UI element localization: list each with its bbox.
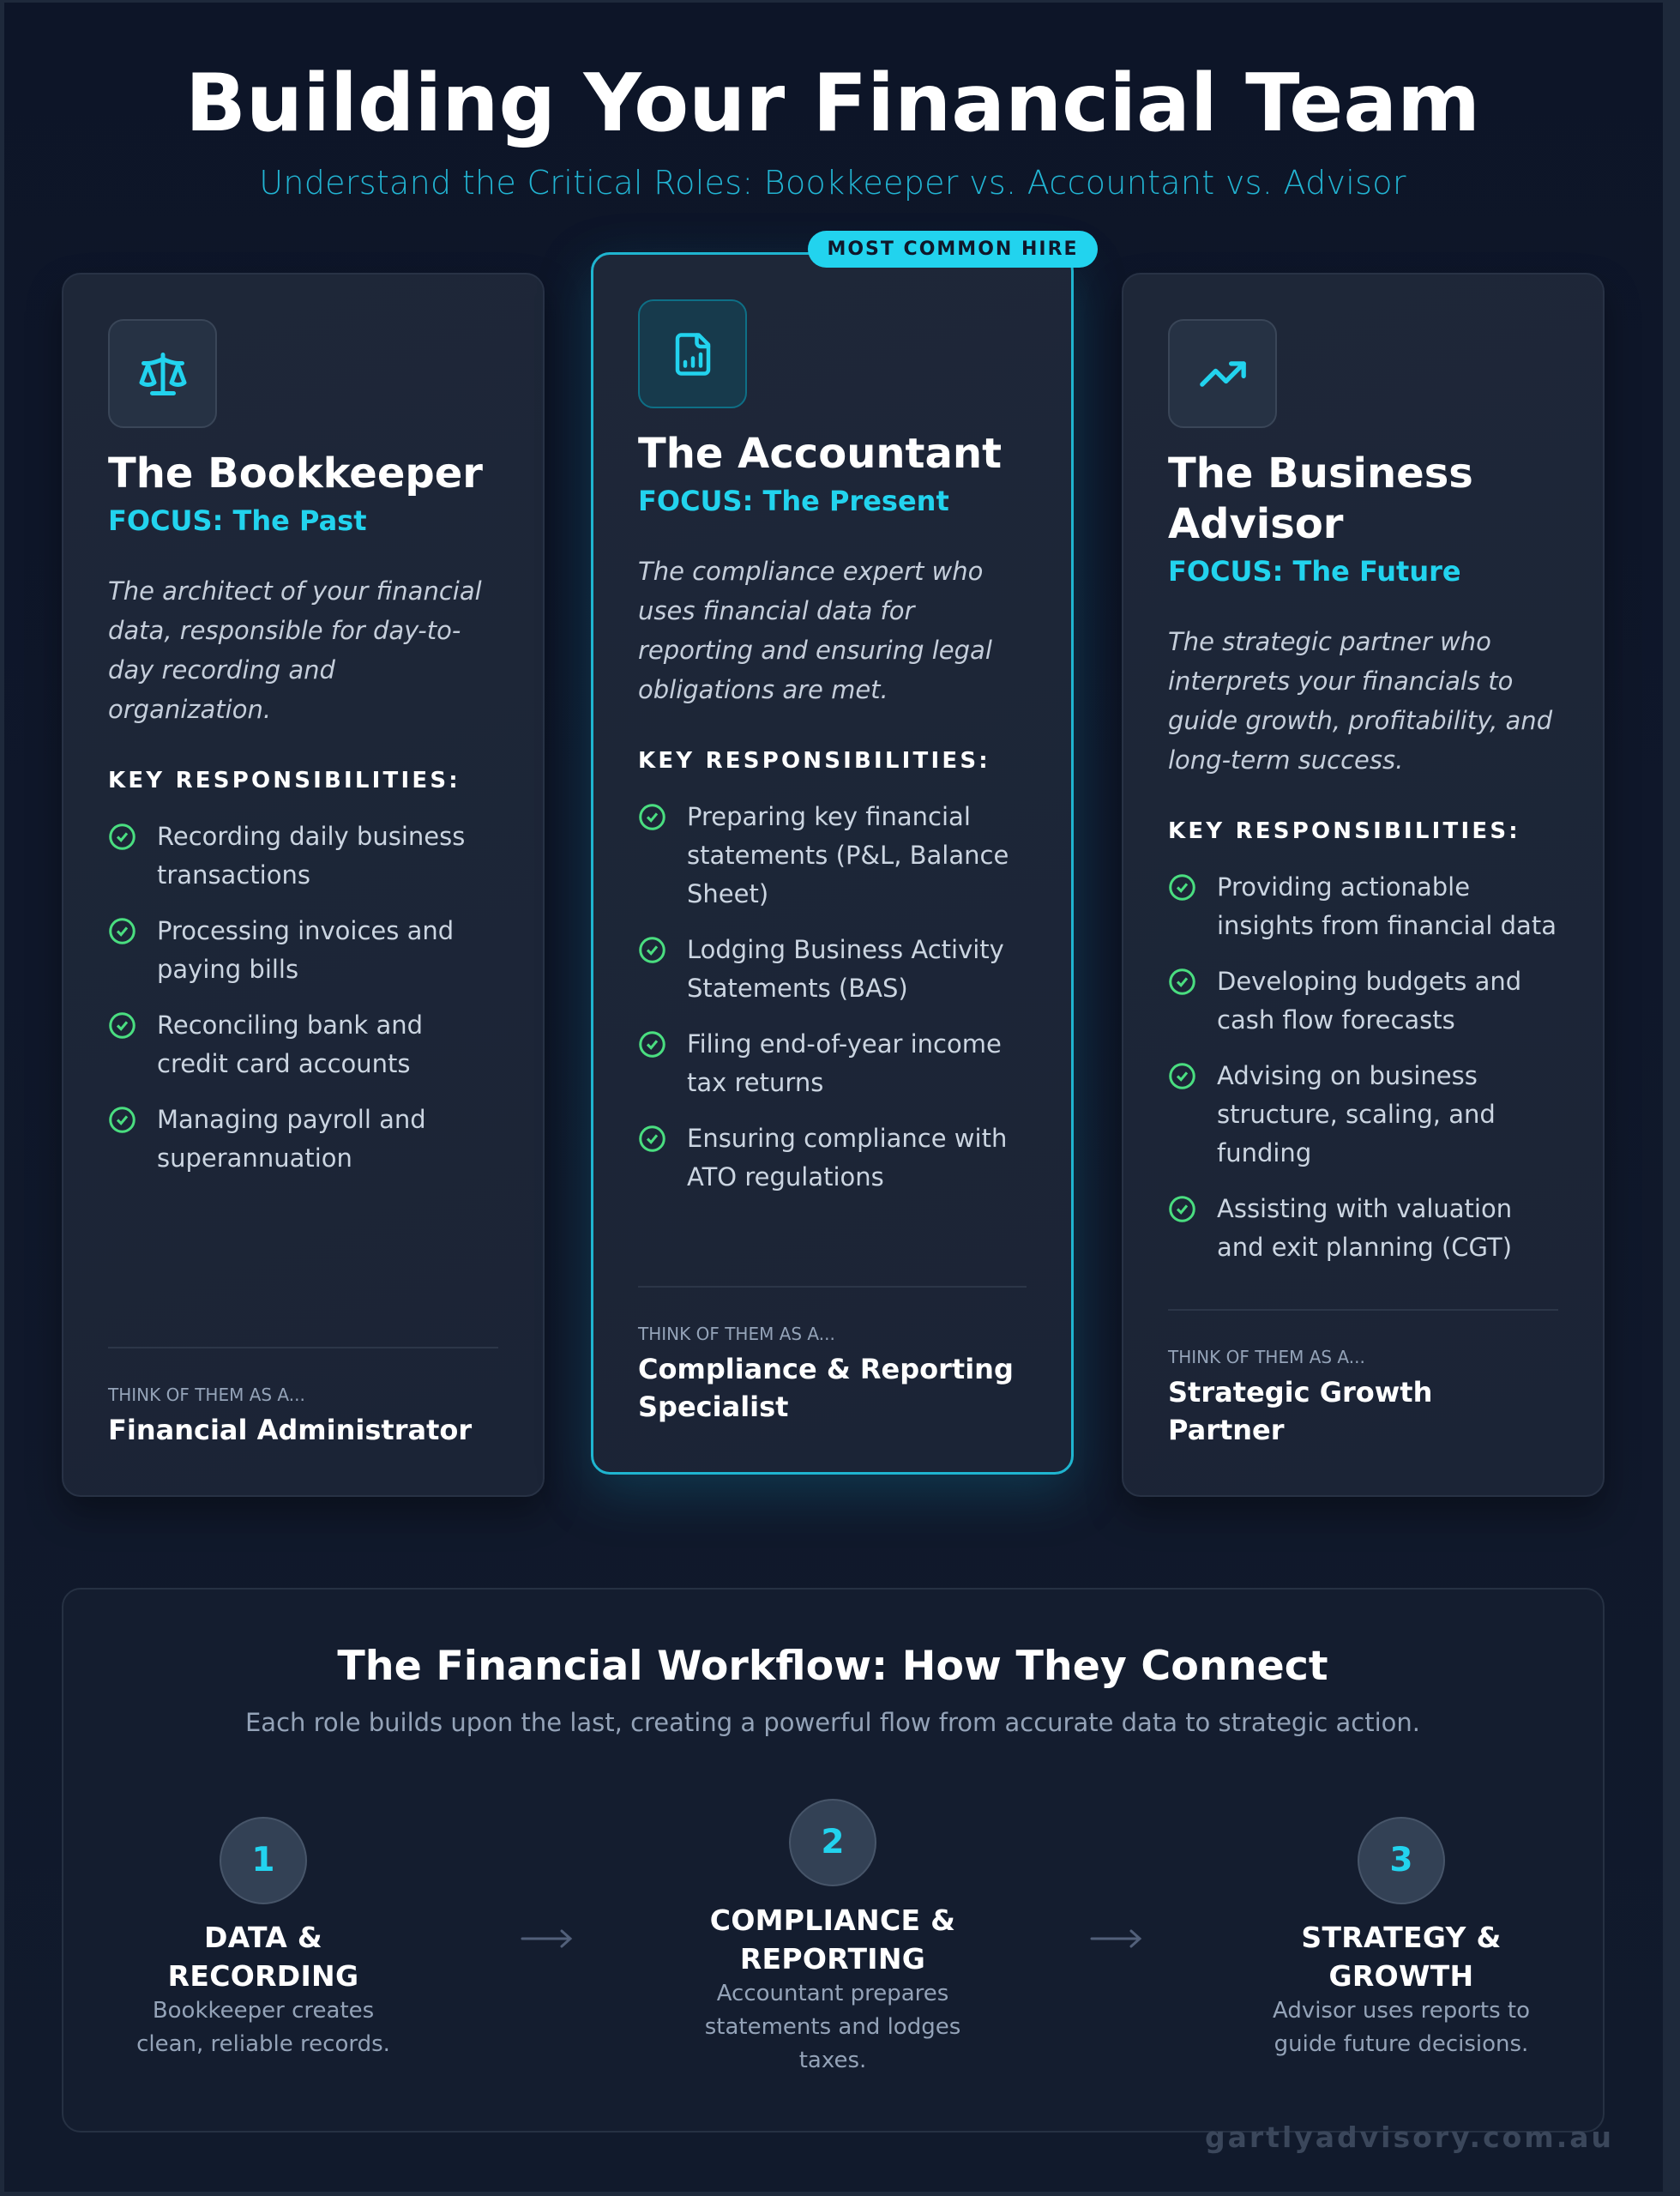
circle 2: [789, 1799, 876, 1886]
description: [1168, 627, 1552, 775]
step 2 text: statements and lodges: [705, 2014, 960, 2040]
responsibilities list: transactions: [157, 860, 310, 890]
step 1: [136, 1817, 390, 2057]
step 3 text: Advisor uses reports to: [1273, 1998, 1530, 2024]
description: interprets your financials to: [1168, 667, 1513, 696]
responsibilities list: Reconciling bank and: [157, 1011, 423, 1040]
step 3 text: [1273, 1998, 1530, 2057]
footer: think of them as: THINK OF THEM AS A...: [108, 1385, 305, 1405]
step 2 text: [705, 1981, 960, 2073]
subtitle: Understand the Critical Roles: Bookkeeper vs. Accountant vs. Advisor: [259, 164, 1406, 202]
circle 1: 1: [251, 1841, 275, 1879]
footer: think of them as: Specialist: [638, 1391, 788, 1423]
description: The architect of your financial: [108, 576, 482, 606]
step 2: [705, 1799, 960, 2073]
footer: think of them as: THINK OF THEM AS A...: [638, 1324, 835, 1344]
badge: most common hire: MOST COMMON HIRE: [827, 238, 1079, 260]
key responsibilities heading: KEY RESPONSIBILITIES:: [638, 748, 991, 774]
heading: The Accountant: The Accountant: [638, 430, 1002, 478]
circle 2: 2: [821, 1823, 845, 1861]
responsibilities list: Recording daily business: [157, 822, 465, 851]
description: organization.: [108, 695, 271, 724]
step 3: [1273, 1817, 1530, 2057]
key responsibilities heading: KEY RESPONSIBILITIES:: [108, 768, 461, 793]
footer: think of them as: Financial Administrator: [108, 1414, 472, 1446]
responsibilities list: superannuation: [157, 1143, 352, 1173]
heading: The Business Advisor: [1168, 449, 1473, 548]
step 1 label: RECORDING: [168, 1959, 358, 1993]
description: uses financial data for: [638, 596, 914, 625]
title: Building Your Financial Team: [185, 57, 1480, 149]
description: data, responsible for day-to-: [108, 616, 461, 645]
responsibilities list: paying bills: [157, 955, 298, 984]
responsibilities list: Providing actionable: [1217, 872, 1470, 902]
responsibilities list: Sheet): [687, 879, 768, 908]
icon: scale: [108, 319, 217, 428]
step 1 text: [136, 1998, 390, 2057]
step 1 label: DATA &: [204, 1921, 322, 1954]
footer: think of them as: [638, 1286, 1027, 1426]
responsibilities list: cash flow forecasts: [1217, 1005, 1455, 1035]
step 2 label: REPORTING: [740, 1942, 925, 1976]
footer: think of them as: Compliance & Reporting: [638, 1353, 1014, 1385]
footer: think of them as: Partner: [1168, 1414, 1285, 1446]
step 3 text: guide future decisions.: [1274, 2031, 1528, 2057]
panel: workflow: [62, 1588, 1605, 2133]
description: day recording and: [108, 655, 335, 685]
responsibilities list: Managing payroll and: [157, 1105, 426, 1134]
responsibilities list: and exit planning (CGT): [1217, 1233, 1512, 1262]
description: [108, 576, 482, 724]
responsibilities list: Statements (BAS): [687, 974, 908, 1003]
circle 1: [220, 1817, 307, 1904]
responsibilities list: Preparing key financial: [687, 802, 971, 831]
responsibilities list: Filing end-of-year income: [687, 1029, 1002, 1059]
step 1 text: Bookkeeper creates: [153, 1998, 374, 2024]
step 2 label: COMPLIANCE &: [710, 1903, 955, 1937]
workflow heading: The Financial Workflow: How They Connect: [337, 1643, 1328, 1690]
watermark: gartlyadvisory.com.au: [1205, 2121, 1614, 2154]
focus: FOCUS: The Future: [1168, 555, 1461, 588]
step 2 text: taxes.: [799, 2048, 866, 2073]
responsibilities list: tax returns: [687, 1068, 823, 1097]
responsibilities list: Ensuring compliance with: [687, 1124, 1007, 1153]
heading: The Business Advisor: Advisor: [1168, 500, 1343, 548]
responsibilities list: credit card accounts: [157, 1049, 411, 1078]
responsibilities list: [109, 822, 465, 1173]
circle 3: [1358, 1817, 1445, 1904]
badge: most common hire: [808, 231, 1098, 268]
description: [638, 557, 992, 704]
responsibilities list: Assisting with valuation: [1217, 1194, 1512, 1223]
arrow 2: [1091, 1929, 1141, 1948]
panel: bookkeeper card: [62, 273, 545, 1497]
workflow subtitle: Each role builds upon the last, creating a powerful flow from accurate data to strategic action.: [245, 1708, 1420, 1737]
icon: file chart: [638, 299, 747, 408]
responsibilities list: [639, 802, 1009, 1192]
responsibilities list: Developing budgets and: [1217, 967, 1521, 996]
focus: FOCUS: The Past: [108, 504, 367, 537]
footer: think of them as: [1168, 1309, 1558, 1449]
responsibilities list: statements (P&L, Balance: [687, 841, 1009, 870]
description: The strategic partner who: [1168, 627, 1491, 656]
responsibilities list: funding: [1217, 1138, 1311, 1167]
responsibilities list: Advising on business: [1217, 1061, 1478, 1090]
step 3 label: STRATEGY &: [1301, 1921, 1502, 1954]
focus: FOCUS: The Present: [638, 485, 949, 517]
description: guide growth, profitability, and: [1168, 706, 1552, 735]
description: long-term success.: [1168, 745, 1403, 775]
icon: trending up: [1168, 319, 1277, 428]
footer: think of them as: [108, 1347, 498, 1449]
responsibilities list: ATO regulations: [687, 1162, 884, 1192]
description: reporting and ensuring legal: [638, 636, 992, 665]
key responsibilities heading: KEY RESPONSIBILITIES:: [1168, 818, 1520, 844]
step 2 text: Accountant prepares: [717, 1981, 948, 2006]
responsibilities list: insights from financial data: [1217, 911, 1557, 940]
responsibilities list: Processing invoices and: [157, 916, 454, 945]
step 2 label: [710, 1903, 955, 1976]
heading: The Business Advisor: The Business: [1168, 449, 1473, 498]
footer: think of them as: Strategic Growth: [1168, 1376, 1432, 1409]
description: obligations are met.: [638, 675, 888, 704]
step 1 text: clean, reliable records.: [136, 2031, 390, 2057]
step 3 label: GROWTH: [1329, 1959, 1473, 1993]
panel: advisor card: [1122, 273, 1605, 1497]
responsibilities list: Lodging Business Activity: [687, 935, 1004, 964]
heading: The Bookkeeper: The Bookkeeper: [108, 449, 483, 498]
description: The compliance expert who: [638, 557, 983, 586]
step 1 label: [168, 1921, 358, 1993]
arrow 1: [521, 1929, 572, 1948]
step 3 label: [1301, 1921, 1502, 1993]
responsibilities list: structure, scaling, and: [1217, 1100, 1496, 1129]
responsibilities list: [1169, 872, 1557, 1262]
footer: think of them as: THINK OF THEM AS A...: [1168, 1347, 1365, 1367]
circle 3: 3: [1389, 1841, 1413, 1879]
panel: accountant card: [591, 252, 1074, 1475]
